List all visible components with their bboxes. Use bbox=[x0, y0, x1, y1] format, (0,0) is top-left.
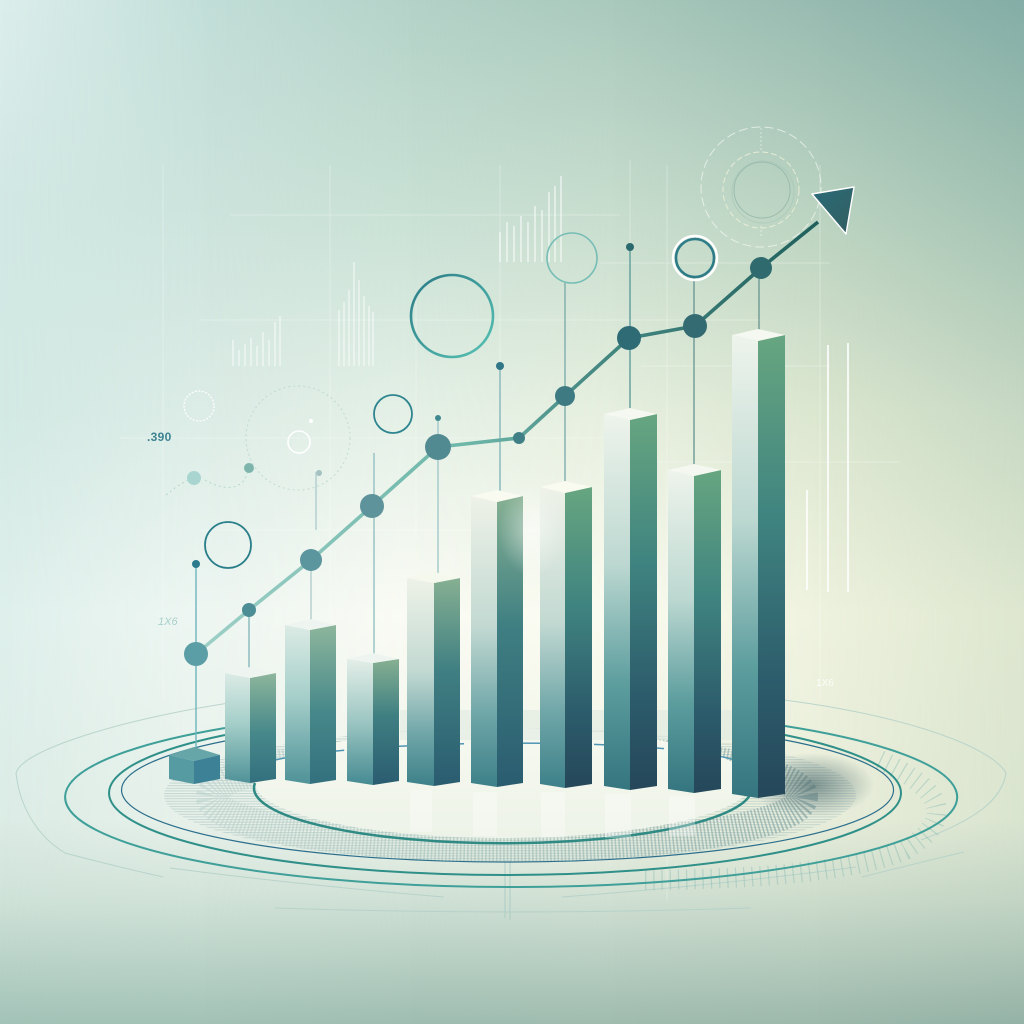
bar 9 bbox=[668, 464, 721, 793]
outer thin arcs bbox=[16, 700, 1006, 920]
hatched disc bbox=[164, 728, 874, 862]
hatch on outer right band bbox=[640, 760, 937, 880]
centre light glow bbox=[498, 484, 566, 576]
faint network left bbox=[166, 386, 350, 495]
white vertical lines right bbox=[807, 343, 848, 592]
bar 5 bbox=[407, 572, 460, 786]
thin blue ring bbox=[122, 740, 894, 862]
bar 3 bbox=[285, 619, 336, 784]
background grid lines bbox=[120, 160, 900, 900]
bar 6 bbox=[471, 490, 523, 787]
bar 10 bbox=[732, 329, 785, 798]
bar 2 bbox=[225, 667, 276, 783]
mini histogram centre bbox=[339, 262, 373, 366]
reflections under bars bbox=[410, 790, 695, 838]
inner floor disc bbox=[255, 728, 751, 838]
mini histogram left bbox=[233, 316, 280, 366]
ring two bbox=[109, 735, 901, 875]
value label lower left: 1X6 bbox=[158, 616, 178, 628]
bar 4 bbox=[347, 653, 399, 785]
bar 1 cube bbox=[169, 747, 220, 784]
arrowhead bbox=[812, 187, 854, 234]
panel behind bars bbox=[400, 710, 740, 740]
mini histogram top bbox=[500, 176, 561, 262]
bar 7 bbox=[540, 481, 592, 788]
dashed target rings upper right bbox=[701, 127, 821, 247]
decorative circles bbox=[205, 233, 717, 568]
bar 8 bbox=[604, 408, 657, 790]
value label right: 1X6 bbox=[816, 678, 834, 689]
line markers bbox=[184, 243, 772, 666]
value label 390: .390 bbox=[147, 430, 172, 444]
floor rings bbox=[16, 700, 1006, 920]
stems bbox=[196, 247, 759, 748]
trend line bbox=[196, 222, 818, 654]
back ring segment bbox=[275, 743, 735, 760]
ring three bbox=[65, 726, 957, 887]
bars bbox=[169, 329, 785, 798]
inner teal ring bbox=[254, 783, 751, 843]
